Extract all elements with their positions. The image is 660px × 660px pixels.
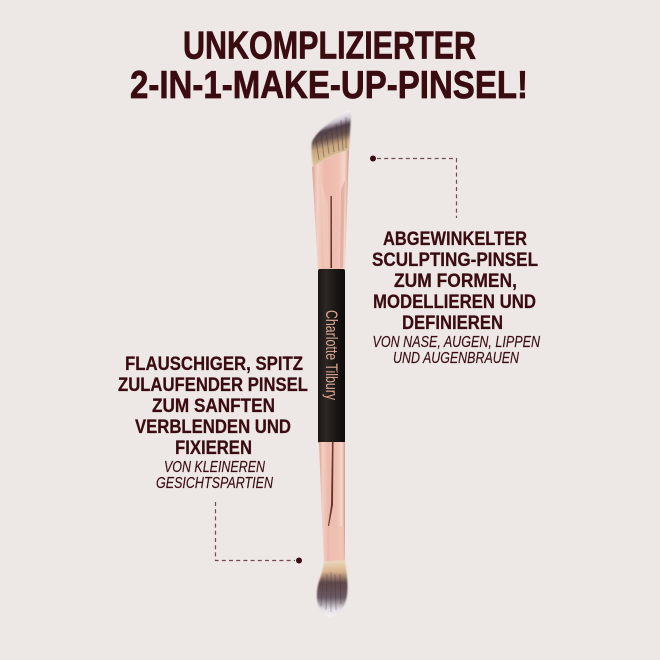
lower ferrule bbox=[319, 442, 345, 562]
text block: blending brush: ZUM SANFTEN bbox=[152, 396, 275, 417]
brush product image bbox=[312, 110, 351, 617]
upper ferrule bbox=[312, 150, 349, 270]
text block: blending brush: FIXIEREN bbox=[175, 438, 252, 459]
title: 2-IN-1-MAKE-UP-PINSEL! bbox=[130, 64, 528, 107]
text block: blending brush: GESICHTSPARTIEN bbox=[156, 475, 274, 492]
text block: sculpting brush: UND AUGENBRAUEN bbox=[393, 350, 520, 367]
angled bristles bbox=[312, 110, 351, 167]
text block: sculpting brush: ABGEWINKELTER bbox=[383, 229, 527, 250]
text block: sculpting brush: ZUM FORMEN, bbox=[394, 271, 517, 292]
text block: sculpting brush: SCULPTING-PINSEL bbox=[372, 250, 538, 271]
fluffy bristles bbox=[317, 560, 348, 617]
text block: sculpting brush: DEFINIEREN bbox=[402, 313, 503, 334]
text block: sculpting brush: VON NASE, AUGEN, LIPPEN bbox=[372, 334, 541, 351]
title bbox=[130, 24, 528, 107]
text block: blending brush: VERBLENDEN UND bbox=[135, 417, 291, 438]
text block: blending brush: FLAUSCHIGER, SPITZ bbox=[125, 354, 303, 375]
brand logo: Charlotte Tilbury bbox=[322, 310, 341, 400]
text block: blending brush: ZULAUFENDER PINSEL bbox=[118, 375, 308, 396]
title: UNKOMPLIZIERTER bbox=[183, 24, 476, 68]
callout line: bottom brush bbox=[216, 502, 302, 564]
text block: sculpting brush bbox=[372, 229, 541, 367]
text block: blending brush: VON KLEINEREN bbox=[164, 459, 266, 476]
text block: sculpting brush: MODELLIEREN UND bbox=[373, 292, 536, 313]
black handle bbox=[318, 269, 345, 443]
callout line: top brush bbox=[370, 156, 456, 218]
text block: blending brush bbox=[118, 354, 308, 492]
